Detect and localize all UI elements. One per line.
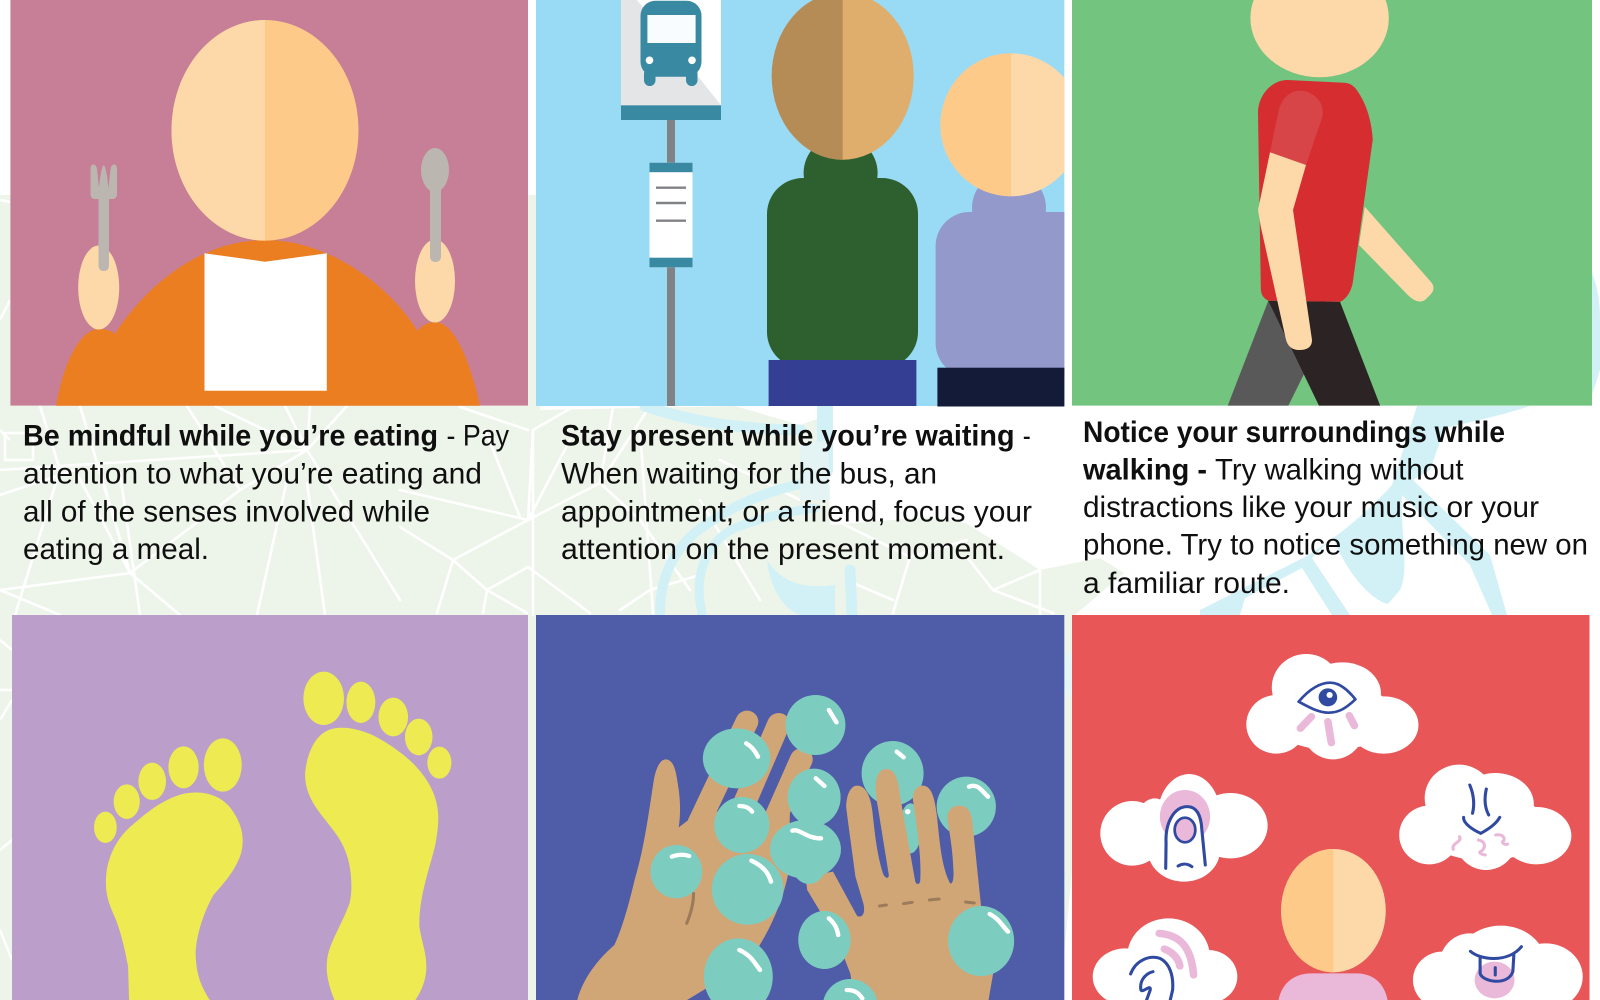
text block: notice surroundings while walking: distractions like your music or your [1083, 491, 1539, 524]
person in green sweater [767, 0, 918, 406]
bus stop sign and pole [621, 0, 721, 406]
panel: feet illustration [12, 615, 528, 1000]
text block: notice surroundings while walking: walking - [1082, 454, 1207, 486]
text block: be mindful while eating: Be mindful while you’re eating [23, 420, 438, 452]
footprints [94, 672, 451, 1000]
text block: stay present while waiting: When waiting for the bus, an [561, 458, 937, 490]
cloud: sight [1246, 654, 1418, 759]
panel: walking illustration [1072, 0, 1592, 406]
right hand holding spoon [415, 148, 455, 322]
bubble highlights [672, 710, 1008, 998]
front arm [1258, 152, 1312, 350]
text block: stay present while waiting: appointment, or a friend, focus your [561, 496, 1032, 528]
person with pink shirt [1278, 849, 1388, 1000]
head [1250, 0, 1389, 77]
panel: five senses illustration [1072, 615, 1590, 1000]
head [172, 20, 358, 241]
text block: be mindful while eating: attention to what you’re eating and [23, 458, 482, 490]
back leg [1228, 301, 1304, 406]
bubbles behind the right hand [862, 741, 996, 853]
text block: stay present while waiting: - [1023, 420, 1031, 452]
text block: notice surroundings while walking: Try walking without [1215, 454, 1464, 486]
text block: notice surroundings while walking: phone. Try to notice something new on [1083, 529, 1588, 562]
text block: notice surroundings while walking: a familiar route. [1083, 567, 1290, 600]
text block: be mindful while eating: eating a meal. [23, 533, 209, 566]
text block: be mindful while eating: all of the senses involved while [23, 496, 430, 528]
panel: waiting illustration [536, 0, 1106, 407]
cloud: taste [1413, 926, 1583, 1000]
person's body with orange shirt [56, 240, 480, 406]
text block: stay present while waiting: attention on the present moment. [561, 533, 1005, 566]
sleeve [1270, 91, 1323, 165]
right hand [805, 769, 993, 1000]
person in purple sweater [936, 53, 1064, 406]
text block: be mindful while eating: - Pay [446, 420, 509, 452]
cloud: hearing [1093, 918, 1237, 1000]
red shirt [1258, 80, 1373, 302]
left hand [576, 722, 801, 1000]
panel: eating illustration [10, 0, 528, 406]
text block: notice surroundings while walking [1082, 416, 1588, 600]
cloud: touch [1100, 774, 1268, 882]
soap bubbles [651, 695, 1014, 1000]
back arm [1359, 207, 1434, 302]
left hand holding fork [78, 164, 119, 330]
cloud: smell [1399, 765, 1571, 870]
text block: notice surroundings while walking: Notice your surroundings while [1083, 416, 1505, 449]
text block: stay present while waiting [561, 420, 1032, 566]
panel: hand washing illustration [536, 615, 1064, 1000]
text block: stay present while waiting: Stay present while you’re waiting [561, 420, 1014, 452]
napkin [204, 253, 327, 391]
front leg [1268, 301, 1380, 406]
text block: be mindful while eating [23, 420, 509, 566]
